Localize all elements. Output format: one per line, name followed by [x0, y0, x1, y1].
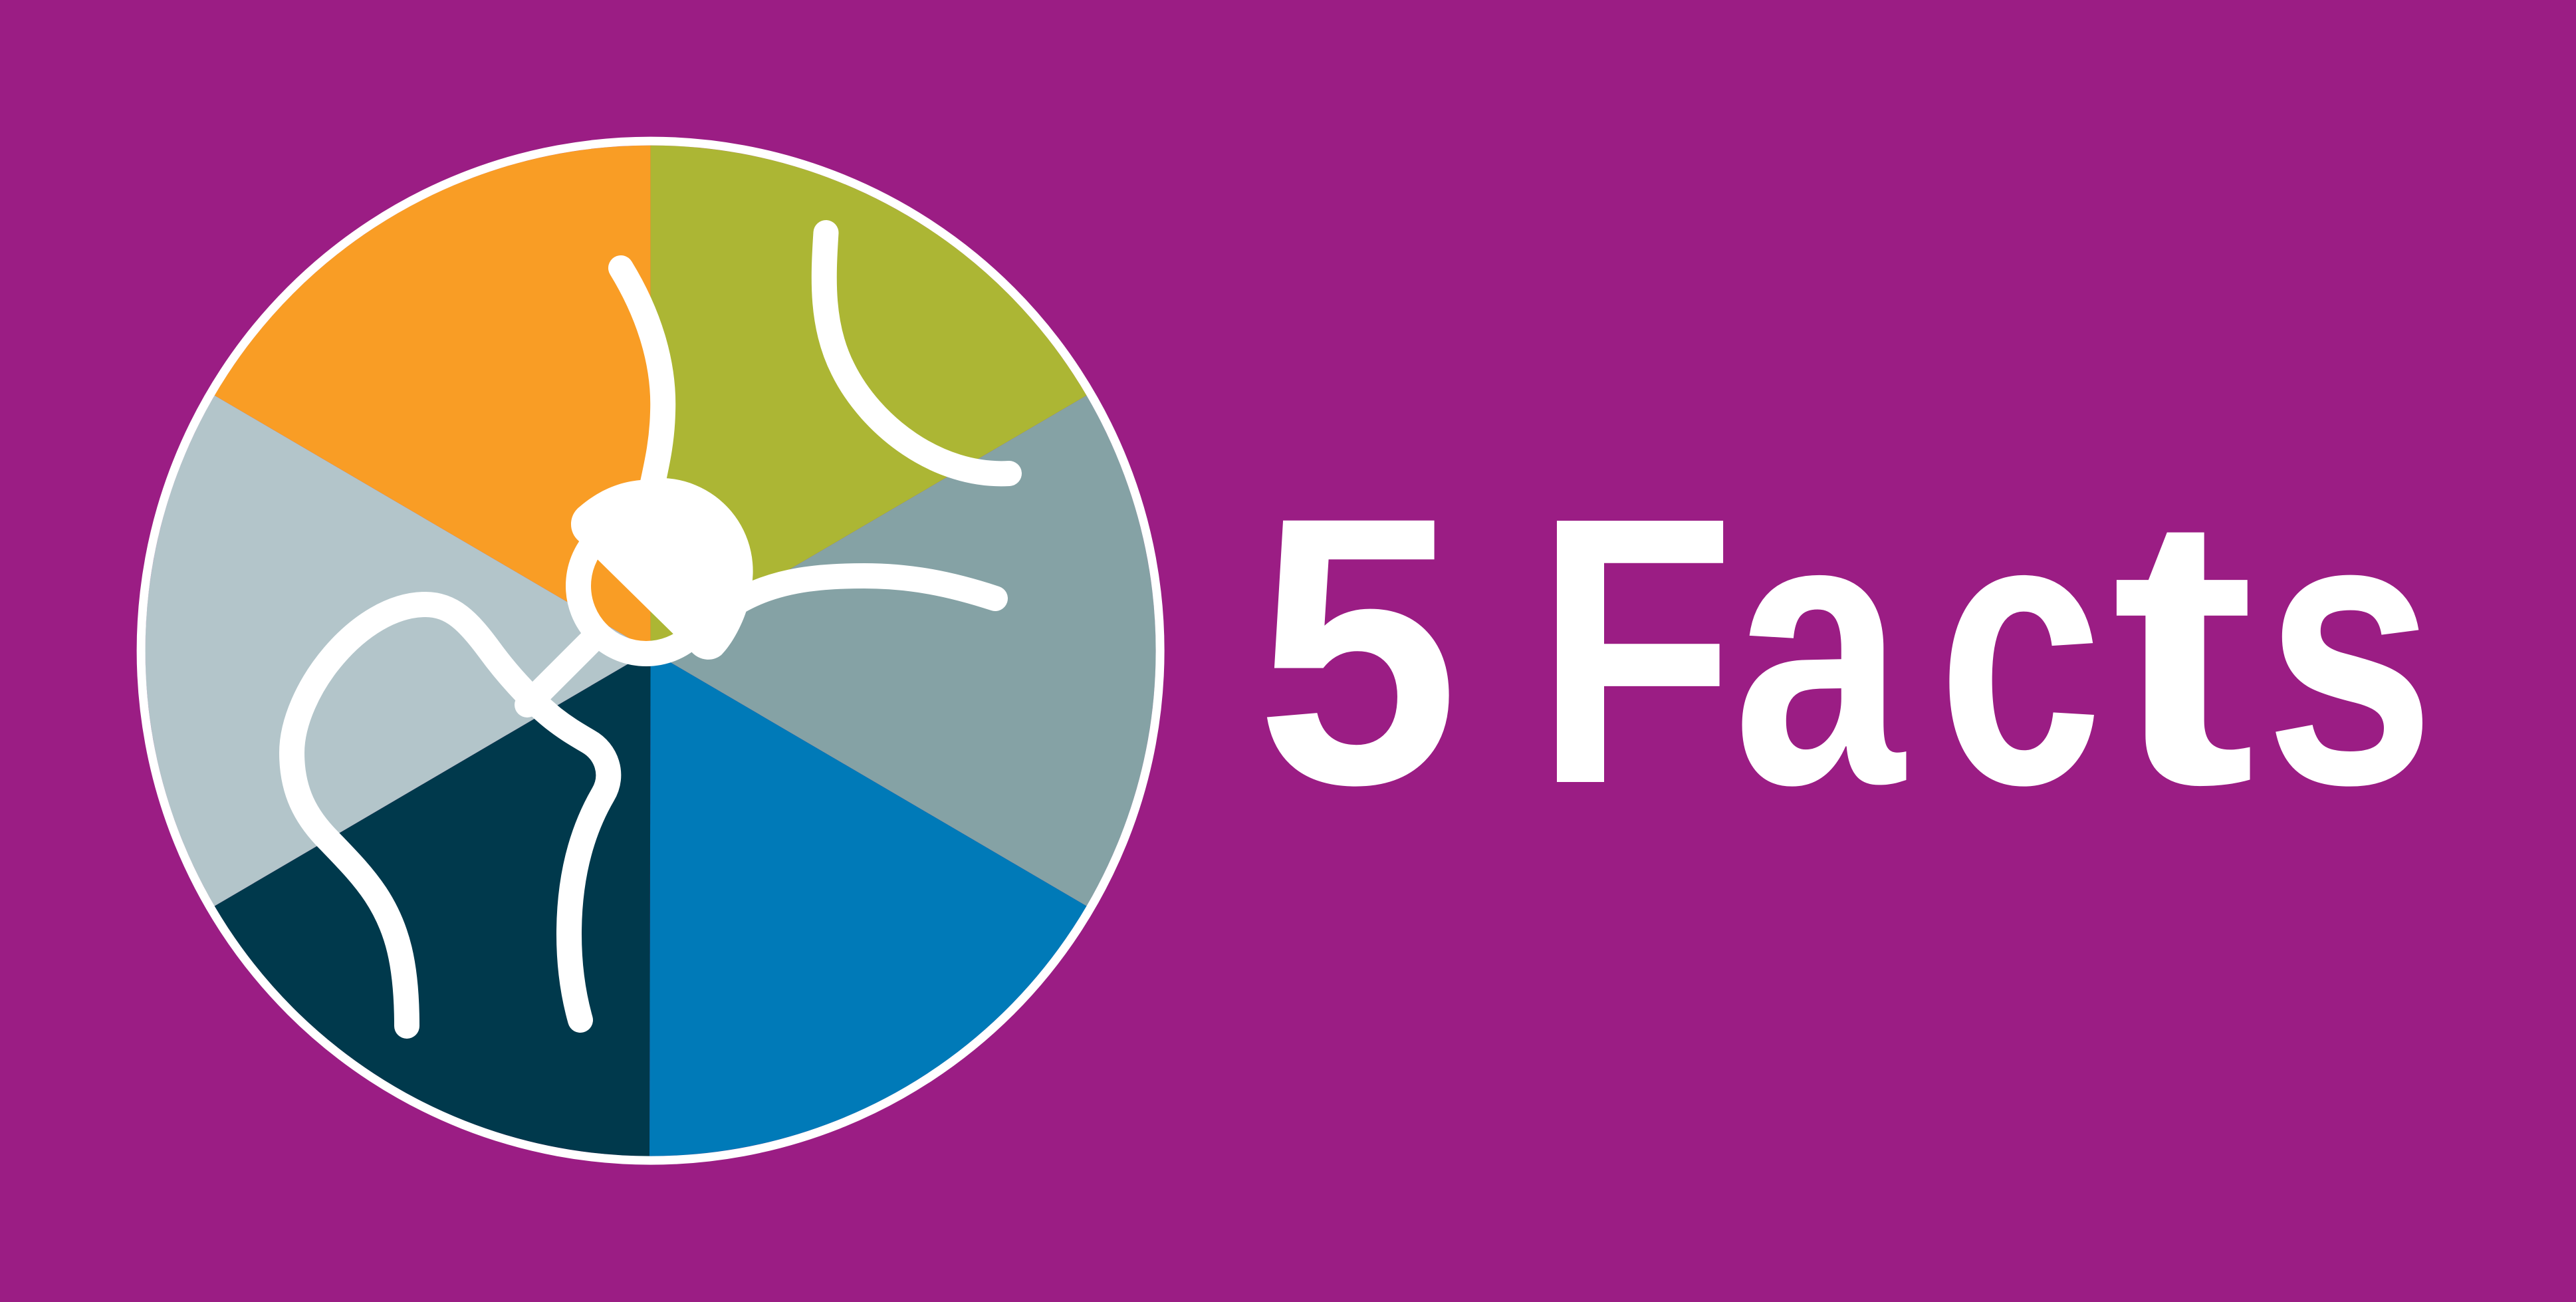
heading: 5 Facts: c: [1938, 434, 2103, 864]
slice: grey teal: [651, 396, 1156, 906]
leg: top right: [824, 233, 1009, 473]
heading: 5 Facts: 5: [1256, 439, 1459, 864]
heading: 5 Facts: s: [2265, 434, 2435, 864]
icon: tick: [292, 233, 1009, 1026]
heading: 5 Facts: a: [1733, 434, 1906, 865]
leg: top left: [621, 268, 663, 489]
heading: 5 Facts: F: [1535, 439, 1735, 863]
slice: light grey: [145, 396, 651, 906]
tick head: [571, 478, 753, 660]
tick body ring: [578, 518, 714, 654]
tick mouth connector: [527, 634, 598, 705]
leg: long left and lower: [292, 604, 608, 1026]
heading: 5 Facts: [1256, 434, 2435, 865]
slice: dark navy: [215, 651, 651, 1156]
pie wheel: [141, 141, 1160, 1160]
white outer ring: [141, 141, 1160, 1160]
heading: 5 Facts: t: [2111, 436, 2255, 864]
leg: right: [738, 576, 995, 602]
slice: olive green: [651, 146, 1087, 651]
slice: blue: [649, 651, 1087, 1156]
slice: orange: [215, 146, 651, 651]
